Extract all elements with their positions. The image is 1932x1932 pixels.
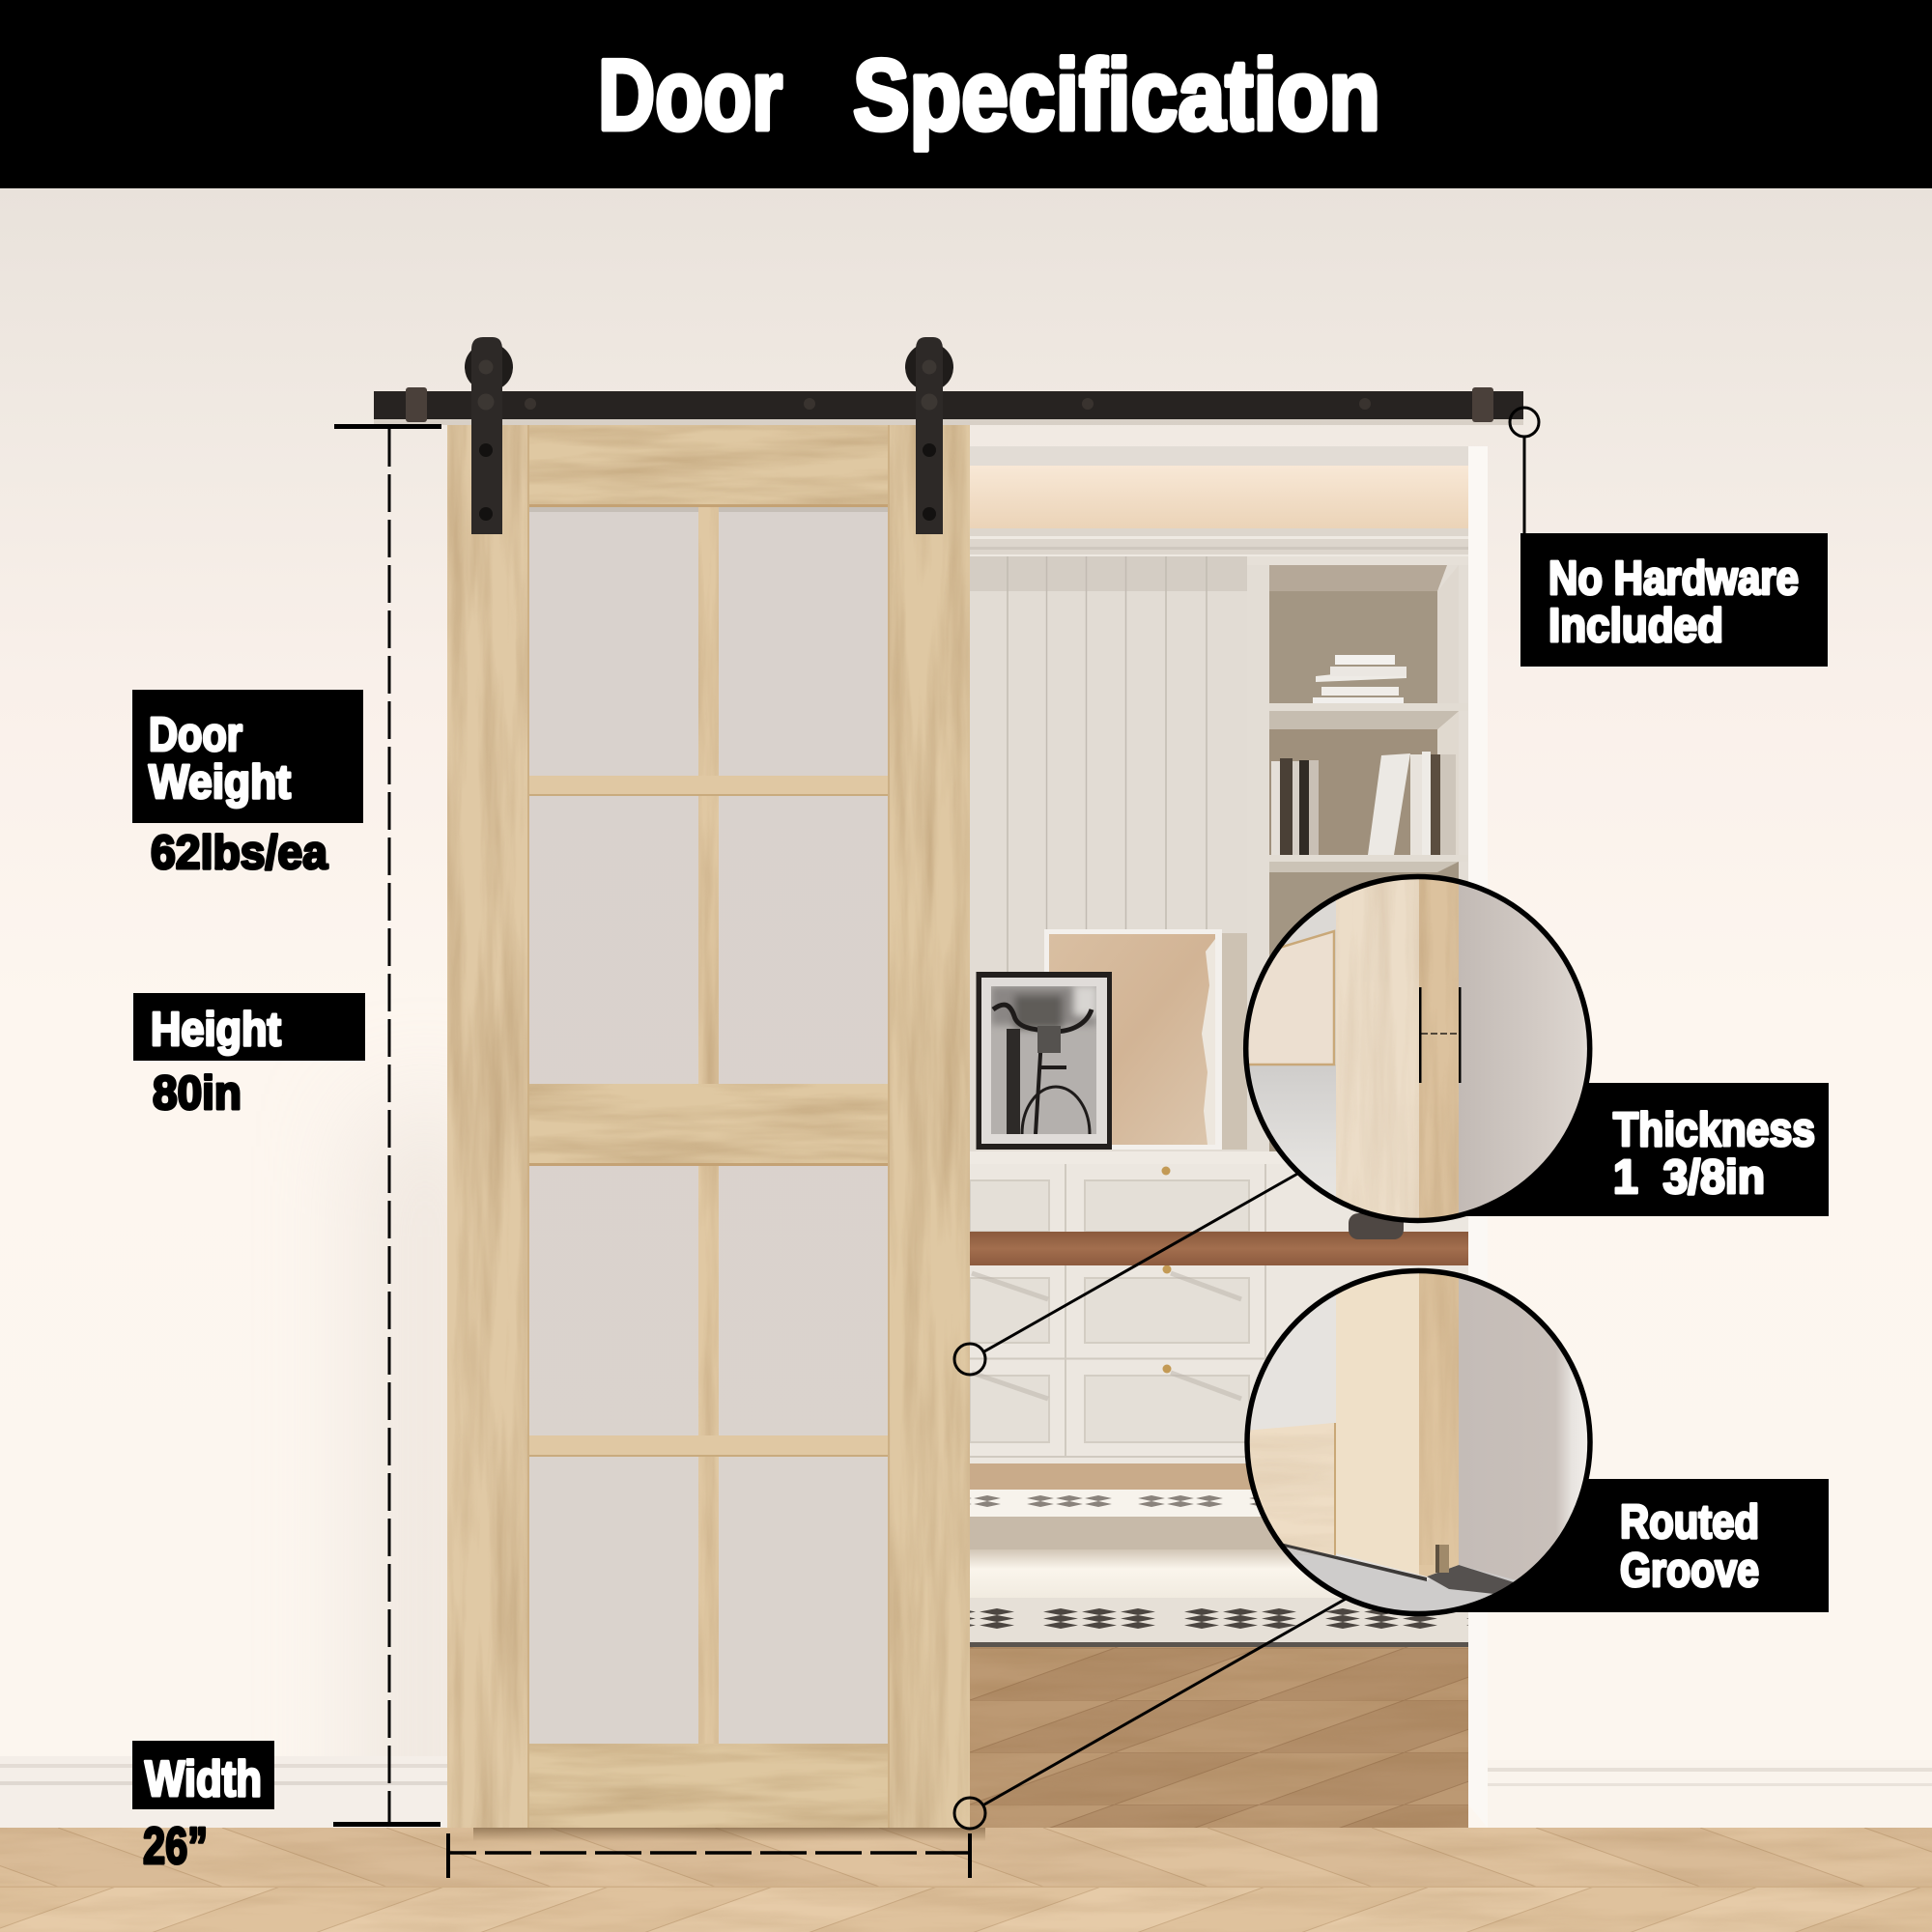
top rail bbox=[528, 425, 889, 507]
label box: routed groove: Routed bbox=[1620, 1496, 1759, 1548]
header bar bbox=[0, 0, 1932, 188]
right stile bbox=[889, 425, 970, 1828]
label: door weight: Door bbox=[149, 709, 242, 761]
zoom circle: routed groove detail bbox=[1244, 1267, 1593, 1617]
middle rail bbox=[528, 1084, 889, 1166]
upper muntin bbox=[528, 776, 889, 796]
bottom rail bbox=[528, 1744, 889, 1828]
glass panes bbox=[528, 507, 889, 1744]
value: door weight: 62lbs/ea bbox=[151, 827, 328, 879]
value: height: 80in bbox=[153, 1067, 242, 1120]
title: Specification bbox=[853, 40, 1380, 152]
width dimension line bbox=[446, 1833, 972, 1878]
walnut desk top bbox=[970, 1232, 1469, 1265]
large watercolour frame bbox=[1044, 929, 1222, 1150]
room seen through the doorway bbox=[970, 466, 1469, 1828]
lower muntin bbox=[528, 1435, 889, 1457]
right hanger bbox=[905, 337, 953, 534]
patterned rug bbox=[970, 1490, 1468, 1647]
label: height: Height bbox=[151, 1004, 281, 1056]
bicycle photo bbox=[976, 972, 1112, 1150]
height dimension line bbox=[333, 424, 441, 1827]
books bbox=[1271, 655, 1456, 855]
connector: thickness marker bbox=[954, 1173, 1299, 1375]
panelled wall bbox=[970, 556, 1247, 1151]
label: door weight bbox=[132, 690, 363, 823]
label box: routed groove bbox=[1418, 1479, 1829, 1612]
cabinets bbox=[970, 1151, 1468, 1463]
zoom circle: door thickness detail bbox=[1244, 874, 1594, 1224]
dark device on desk bbox=[1349, 1213, 1404, 1239]
baseboards bbox=[0, 1756, 1932, 1828]
crown molding bbox=[970, 528, 1468, 556]
label box: no hardware included: No Hardware bbox=[1548, 553, 1799, 605]
herringbone floor bbox=[0, 1828, 1932, 1932]
label box: no hardware included: Included bbox=[1548, 600, 1723, 652]
value: width: 26” bbox=[143, 1817, 208, 1875]
label box: thickness bbox=[1418, 1083, 1829, 1216]
door frame trim bbox=[970, 446, 1488, 1828]
label: door weight: Weight bbox=[149, 756, 291, 809]
title: Door bbox=[598, 40, 782, 152]
sliding barn door hardware bbox=[374, 337, 1523, 534]
label box: no hardware included bbox=[1520, 533, 1828, 667]
label box: thickness: 1 3/8in bbox=[1613, 1151, 1765, 1204]
title bbox=[598, 40, 1380, 152]
floor strip behind rug bbox=[970, 1463, 1468, 1490]
knobs bbox=[1161, 1167, 1171, 1374]
connector: hardware marker bbox=[1510, 408, 1539, 533]
thickness marker bbox=[1419, 987, 1461, 1083]
brown floor in room bbox=[970, 1647, 1468, 1828]
label box: thickness: Thickness bbox=[1613, 1104, 1815, 1156]
center mullion bbox=[698, 507, 719, 1744]
connector: groove marker bbox=[954, 1598, 1348, 1829]
bookcase bbox=[1247, 565, 1468, 1164]
label: width: Width bbox=[145, 1751, 262, 1807]
left stile bbox=[447, 425, 528, 1828]
left hanger bbox=[465, 337, 513, 534]
label box: routed groove: Groove bbox=[1620, 1545, 1759, 1597]
track rail bbox=[374, 387, 1523, 425]
door bbox=[447, 425, 970, 1828]
ceiling glow bbox=[970, 466, 1468, 529]
label: height bbox=[133, 993, 365, 1061]
